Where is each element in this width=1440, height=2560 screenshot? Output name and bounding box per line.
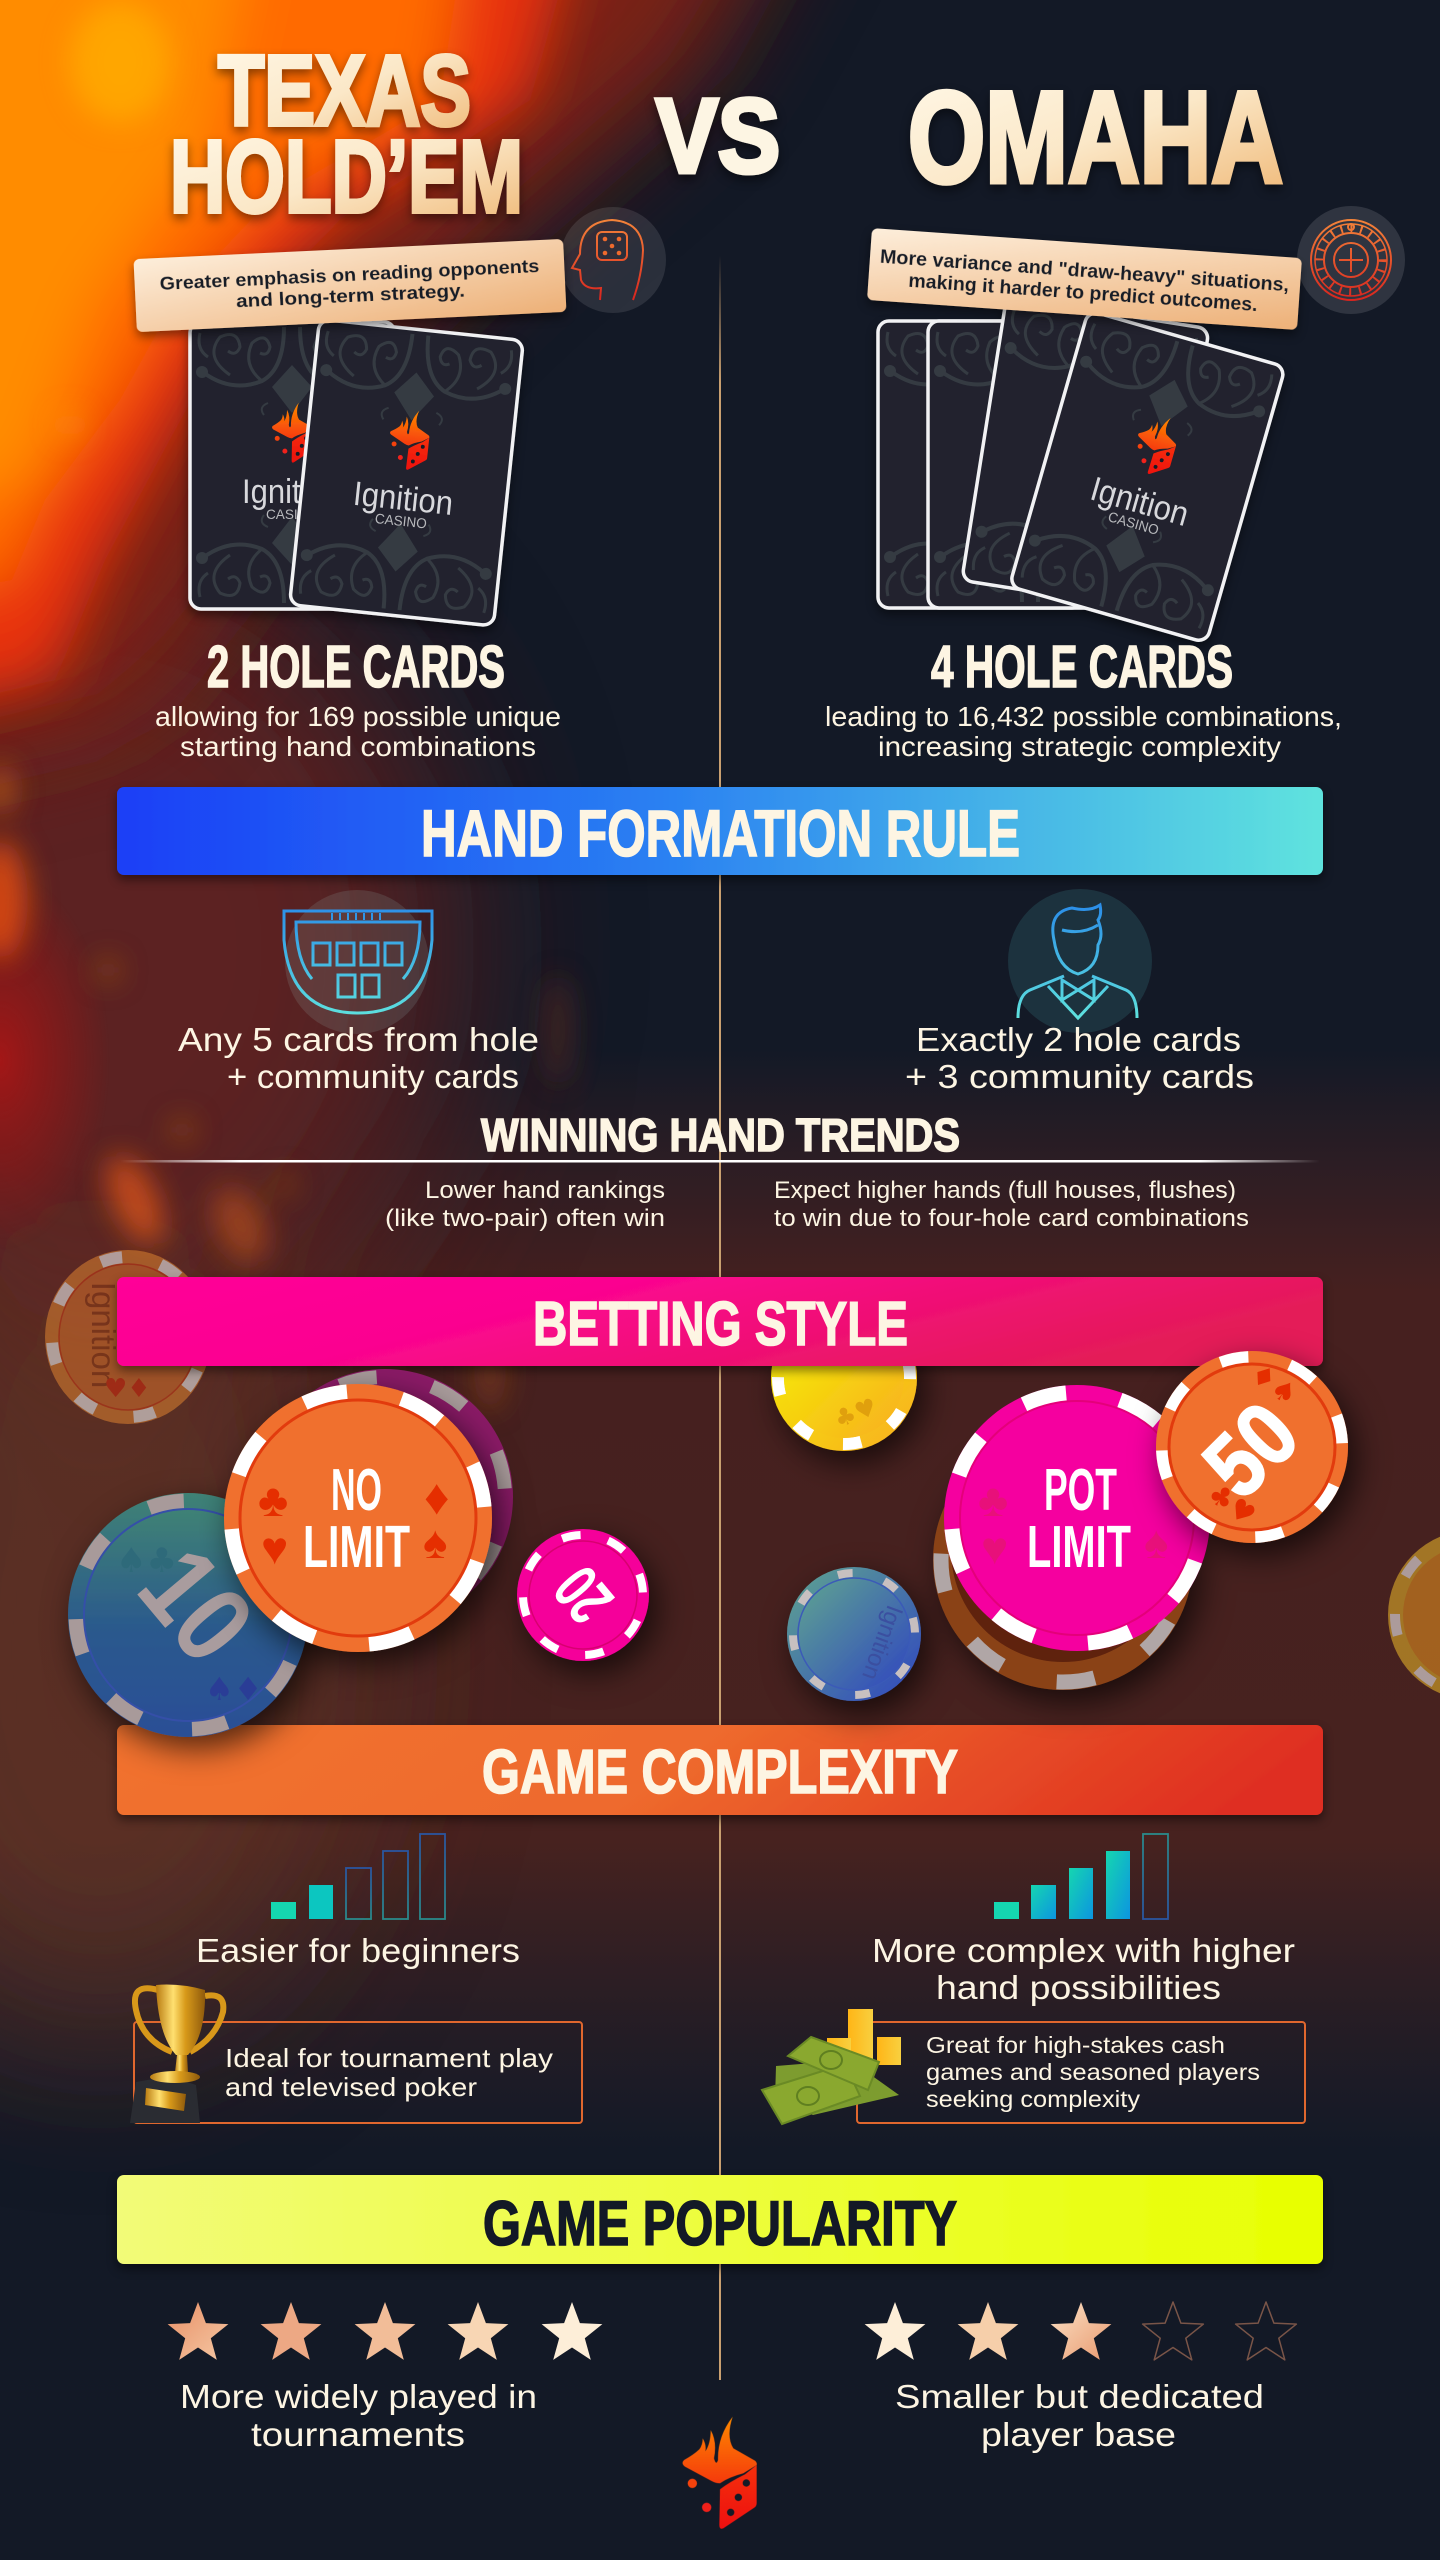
text: any 5 cards: + community cards xyxy=(227,1058,519,1095)
chip: blue 10: ♠♦ xyxy=(205,1670,262,1708)
title: VS: VS xyxy=(656,78,780,195)
text: more widely played: tournaments xyxy=(251,2416,465,2453)
chip: yellow xyxy=(771,1305,917,1451)
chip: blue 10 xyxy=(68,1493,308,1737)
title: Texas Hold'em: HOLD’EM xyxy=(170,119,523,234)
heading: winning hand trends: WINNING HAND TRENDS xyxy=(481,1109,960,1161)
chip: no limit: NO xyxy=(331,1457,382,1523)
bar chart: complex level xyxy=(994,1834,1168,1919)
chip: brown behind xyxy=(933,1430,1193,1690)
chip: pink 20: 20 xyxy=(539,1553,627,1637)
text: lower hand rankings: Lower hand rankings xyxy=(425,1177,665,1204)
text: more widely played: More widely played in xyxy=(180,2378,537,2415)
band: game complexity: GAME COMPLEXITY xyxy=(482,1738,958,1807)
chip: pot limit xyxy=(944,1385,1210,1651)
text: 16,432 combinations: increasing strategic complexity xyxy=(878,731,1281,762)
chip: pot limit: ♠ xyxy=(1144,1516,1168,1568)
text: smaller but dedicated: Smaller but dedicated xyxy=(895,2378,1264,2415)
text: any 5 cards xyxy=(178,1021,539,1095)
callout: tournament play: Ideal for tournament play xyxy=(225,2043,553,2073)
cards: two hole cards: CASINO xyxy=(266,506,318,522)
text: 16,432 combinations xyxy=(825,701,1342,762)
chip: orange 50 xyxy=(1156,1351,1348,1543)
callout: left note: Greater emphasis on reading opponents xyxy=(159,256,540,294)
callout: tournament play xyxy=(134,2022,582,2123)
chip: pot limit: ♥ xyxy=(981,1522,1008,1574)
icon: trophy xyxy=(130,1985,223,2123)
chip: faded orange xyxy=(45,1250,211,1424)
chip: pot limit: LIMIT xyxy=(1027,1514,1131,1580)
chip: blue 10: ♠♣ xyxy=(116,1541,177,1581)
title: Texas Hold'em xyxy=(170,35,523,234)
text: expect higher hands xyxy=(774,1177,1249,1232)
icon: poker table xyxy=(284,890,432,1034)
callout: right note: More variance and "draw-heavy" situations, xyxy=(879,247,1290,296)
center divider line xyxy=(719,255,721,2380)
icon: roulette wheel xyxy=(1297,206,1405,314)
callout: high stakes: seeking complexity xyxy=(926,2086,1140,2112)
text: more complex xyxy=(872,1932,1295,2006)
title: Texas Hold'em: TEXAS xyxy=(218,35,471,147)
bar chart: beginner level xyxy=(271,1834,445,1919)
text: expect higher hands: Expect higher hands (full houses, flushes) xyxy=(774,1177,1236,1204)
text: easier for beginners: Easier for beginners xyxy=(196,1932,520,1969)
text: more complex: More complex with higher xyxy=(872,1932,1295,1969)
chip: clipped right xyxy=(1388,1530,1440,1700)
text: exactly 2 hole cards: + 3 community cards xyxy=(905,1058,1254,1095)
band: game popularity: GAME POPULARITY xyxy=(483,2189,957,2259)
chip: pink 20 xyxy=(517,1529,649,1661)
band: game popularity xyxy=(117,2175,1323,2264)
rating: five stars xyxy=(168,2302,602,2360)
callout: high stakes: Great for high-stakes cash xyxy=(926,2032,1225,2058)
callout: right note: making it harder to predict outcomes. xyxy=(908,271,1258,316)
text: 169 combinations xyxy=(155,701,561,762)
cards: two hole cards: Ignition xyxy=(242,473,342,511)
cards: two hole cards xyxy=(190,319,523,626)
text: any 5 cards: Any 5 cards from hole xyxy=(178,1021,539,1058)
text: 16,432 combinations: leading to 16,432 possible combinations, xyxy=(825,701,1342,732)
cards: four hole cards xyxy=(878,297,1285,643)
text: more complex: hand possibilities xyxy=(936,1969,1221,2006)
rating: three stars xyxy=(865,2302,1296,2360)
icon: head with dice xyxy=(560,207,666,313)
text: expect higher hands: to win due to four-hole card combinations xyxy=(774,1205,1249,1232)
chip: pot limit: POT xyxy=(1044,1457,1117,1523)
cards: two hole cards: Ignition xyxy=(351,475,455,523)
icon: dealer xyxy=(1008,889,1152,1033)
chip: no limit: ♥ xyxy=(261,1522,288,1574)
chip: no limit: LIMIT xyxy=(303,1514,410,1580)
callout: tournament play: and televised poker xyxy=(225,2072,477,2102)
callout: left note xyxy=(133,239,566,332)
text: 169 combinations: allowing for 169 possible unique xyxy=(155,701,561,732)
chip: purple behind xyxy=(257,1369,513,1625)
band: hand formation rule xyxy=(117,787,1323,875)
callout: high stakes: games and seasoned players xyxy=(926,2059,1260,2085)
chip: faded teal xyxy=(787,1567,921,1701)
chip: orange 50: ♦♠ xyxy=(1244,1356,1304,1412)
band: hand formation rule: HAND FORMATION RULE xyxy=(421,796,1020,870)
icon: money and coins xyxy=(762,2009,901,2124)
chip: orange 50: 50 xyxy=(1185,1384,1318,1517)
heading: 2 hole cards: 2 HOLE CARDS xyxy=(207,634,505,700)
band: betting style xyxy=(117,1277,1323,1366)
text: exactly 2 hole cards xyxy=(905,1021,1254,1095)
text: smaller but dedicated: player base xyxy=(981,2416,1176,2453)
chip: no limit xyxy=(224,1384,492,1652)
band: betting style: BETTING STYLE xyxy=(533,1290,908,1359)
callout: left note: and long-term strategy. xyxy=(236,281,465,311)
cards: two hole cards: CASINO xyxy=(374,510,428,531)
cards: four hole cards: CASINO xyxy=(1106,508,1161,538)
text: exactly 2 hole cards: Exactly 2 hole cards xyxy=(916,1021,1241,1058)
band: game complexity xyxy=(117,1725,1323,1815)
text: lower hand rankings: (like two-pair) often win xyxy=(385,1205,665,1232)
text: 169 combinations: starting hand combinations xyxy=(180,731,536,762)
chip: no limit: ♠ xyxy=(423,1516,447,1568)
cards: four hole cards: Ignition xyxy=(1086,470,1193,534)
chip: blue 10: 10 xyxy=(115,1525,278,1685)
chip: orange 50: ♣♥ xyxy=(1202,1476,1262,1532)
chip: pot limit: ♣ xyxy=(978,1474,1008,1526)
logo: flaming dice xyxy=(683,2417,757,2529)
text: smaller but dedicated xyxy=(895,2378,1264,2453)
callout: right note xyxy=(867,228,1302,330)
heading: 4 hole cards: 4 HOLE CARDS xyxy=(931,634,1233,700)
chip: no limit: ♣ xyxy=(258,1474,288,1526)
text: more widely played xyxy=(180,2378,537,2453)
title: Omaha: OMAHA xyxy=(908,64,1283,210)
chip: yellow: ♣♥ xyxy=(830,1393,880,1434)
chip: faded teal: Ignition xyxy=(856,1602,908,1684)
chip: faded orange: Ignition xyxy=(85,1282,122,1388)
chip: faded orange: ♥♦ xyxy=(104,1374,151,1404)
chip: no limit: ♦ xyxy=(424,1469,450,1525)
text: lower hand rankings xyxy=(385,1177,665,1232)
callout: high stakes xyxy=(857,2022,1305,2123)
